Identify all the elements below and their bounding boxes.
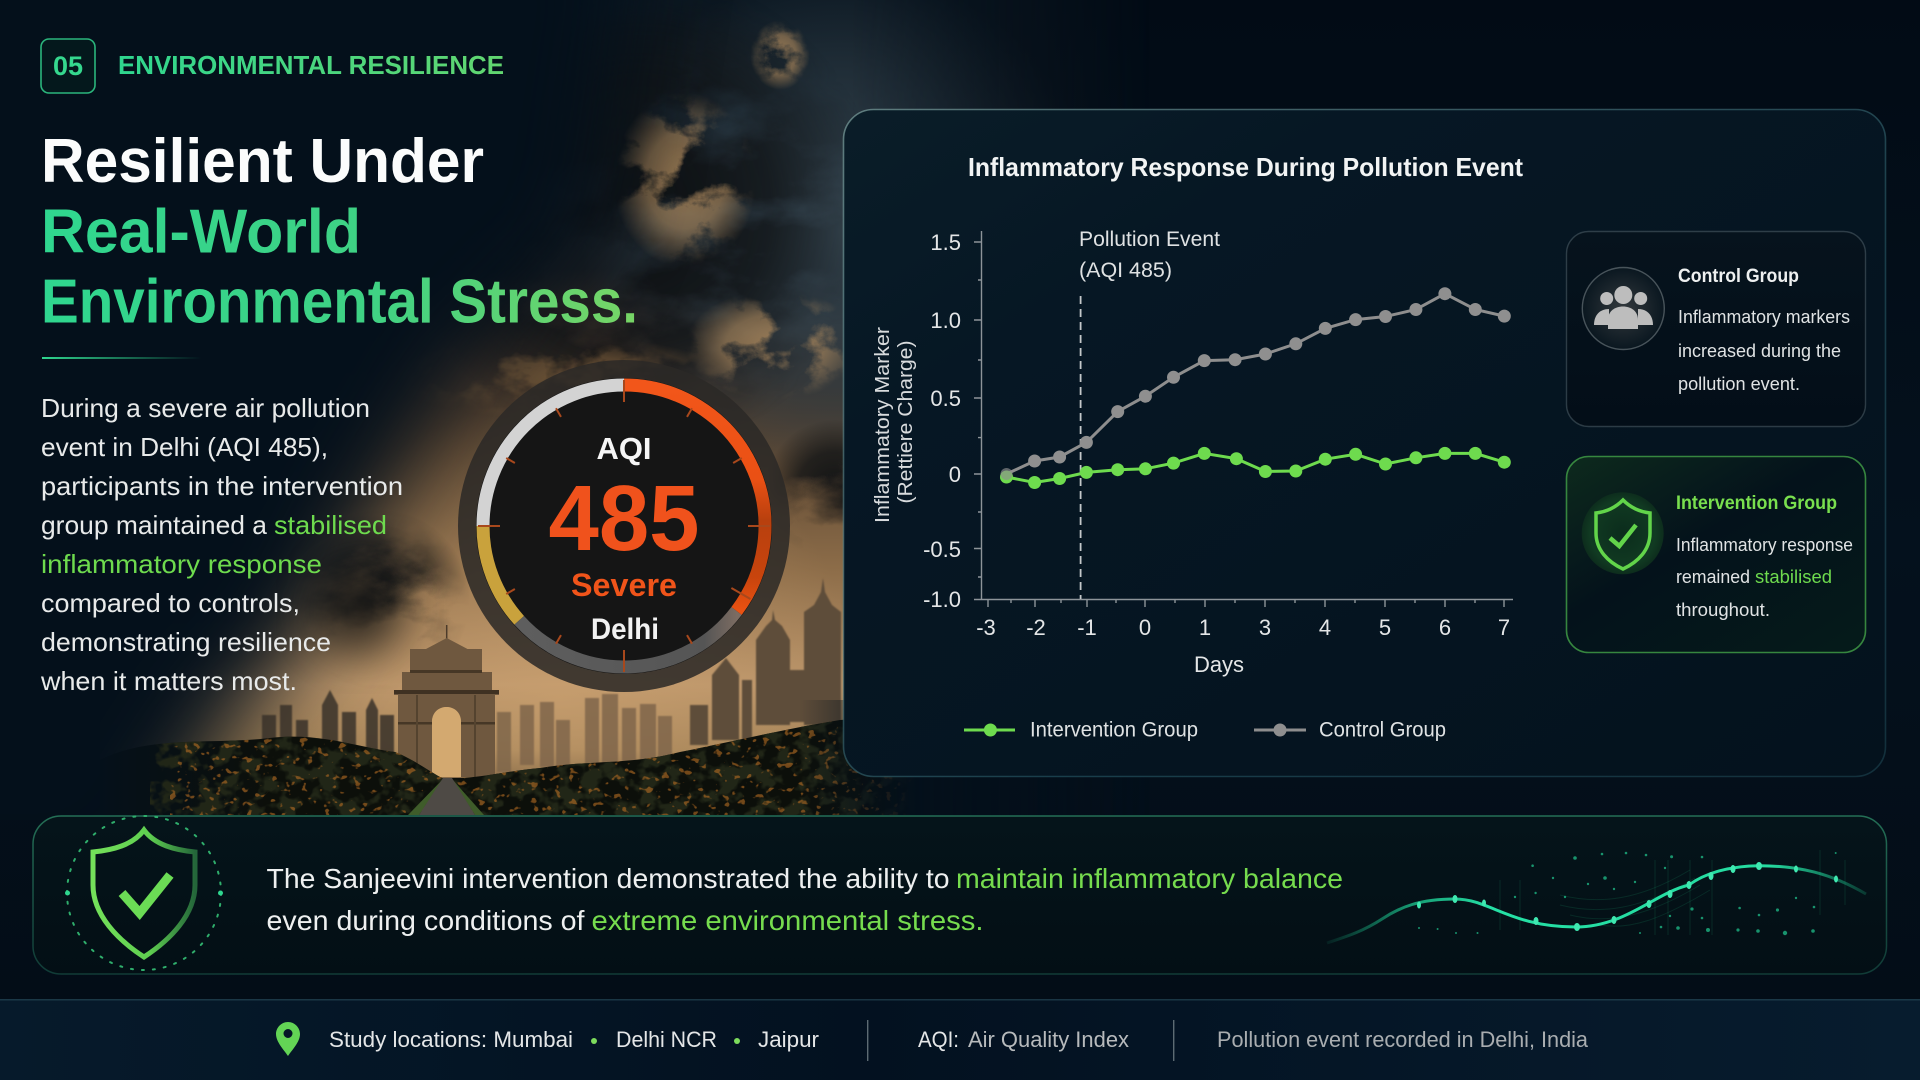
card title: Intervention Group [1676,492,1837,514]
y axis labels: 1.5 [930,230,961,255]
card text: pollution event. [1678,373,1800,394]
intro paragraph: group maintained a [41,510,268,540]
x axis labels: 1 [1199,615,1211,640]
legend: control: Control Group [1319,718,1446,742]
main title: Environmental Stress. [41,268,638,336]
gauge arc: yellow segment [483,526,519,620]
event note: Pollution event recorded in Delhi, India [1217,1027,1589,1052]
intro paragraph: During a severe air pollution [41,393,370,423]
intro paragraph: inflammatory response [41,549,322,579]
x axis labels: -1 [1077,615,1097,640]
x axis labels: 0 [1139,615,1151,640]
AQI label: AQI [596,431,652,466]
panel: key takeaway banner [33,816,1886,974]
main title: Resilient Under [41,127,484,196]
card text: Inflammatory response [1676,534,1853,555]
y axis labels: 0.5 [930,386,961,411]
gauge arc: white segment [483,385,624,526]
x axis title: Days [1194,652,1244,677]
tree canopy [128,720,900,815]
card: intervention group [1566,456,1866,652]
intro paragraph: demonstrating resilience [41,627,331,657]
sky gradient [138,0,978,778]
line chart [871,227,1513,677]
card text: throughout. [1676,599,1770,620]
avenue road [408,779,443,815]
study locations: Jaipur [758,1027,819,1052]
y axis title [871,327,917,523]
pollution event marker [1079,227,1220,599]
legend: control [1254,718,1446,742]
pollution event marker: Pollution Event [1079,227,1220,251]
x axis labels: -2 [1026,615,1046,640]
x axis labels: 7 [1498,615,1510,640]
takeaway text: even during conditions of [266,905,585,936]
study locations: Study locations: Mumbai [329,1027,573,1052]
y axis labels: 0 [949,462,961,487]
y axis labels: 1.0 [930,308,961,333]
x axis labels: -3 [976,615,996,640]
slate upper sky [622,8,989,454]
India Gate monument [394,625,499,777]
background scene: Delhi under polluted sky [134,0,1028,815]
gauge ticks [478,380,770,672]
section label: ENVIRONMENTAL RESILIENCE [118,50,504,80]
AQI gauge [458,360,790,692]
y axis title: Inflammatory Marker [871,327,894,523]
intro paragraph [40,393,403,696]
y axis labels [923,230,961,612]
badge 05: 05 [53,51,83,81]
takeaway text [266,863,1343,936]
study locations: Delhi NCR [616,1027,717,1052]
card text: remained [1676,566,1750,587]
series: intervention group [1000,447,1511,489]
dark cloud over gate [318,568,402,652]
intro paragraph: when it matters most. [40,666,297,696]
x axis labels [976,615,1510,640]
card text: Inflammatory markers [1678,306,1850,327]
badge 05 [41,39,95,93]
gauge arc: grey segment [519,611,737,667]
legend: intervention: Intervention Group [1030,718,1198,742]
chart title: Inflammatory Response During Pollution Event [968,152,1523,182]
intro paragraph: participants in the intervention [41,471,403,501]
section badge and label [41,39,504,93]
x axis labels: 3 [1259,615,1271,640]
main title: Real-World [41,198,361,266]
warm glow [364,458,732,778]
brown cloud band [462,346,692,400]
icon: shield with check [65,816,223,970]
AQI value: 485 [548,466,700,570]
gauge arc: orange segment [624,385,765,611]
main title [41,127,638,336]
pollution event marker: (AQI 485) [1079,258,1172,282]
y axis title: (Rettiere Charge) [894,340,917,504]
x axis labels: 6 [1439,615,1451,640]
card title: Control Group [1678,265,1799,287]
axes [974,231,1513,607]
icon: location pin [276,1022,300,1056]
icon: shield [1582,492,1664,574]
intro paragraph: compared to controls, [41,588,300,618]
card: control group [1566,232,1866,426]
series: control group [1006,287,1511,474]
decorative data wave [1327,850,1866,943]
AQI definition: Air Quality Index [968,1027,1129,1052]
y axis labels: -1.0 [923,587,961,612]
x axis labels: 5 [1379,615,1391,640]
panel: chart [844,110,1886,776]
far skyline [262,578,841,772]
footer bar [0,999,1920,1080]
severity label: Severe [571,567,677,603]
takeaway text: The Sanjeevini intervention demonstrated the ability to [266,863,950,894]
y axis labels: -0.5 [923,537,961,562]
card text [1678,306,1850,394]
dark storm clouds [306,40,844,642]
study locations [329,1027,819,1052]
card text: stabilised [1755,566,1832,587]
icon: people [1582,268,1664,350]
intro paragraph: event in Delhi (AQI 485), [41,432,328,462]
takeaway text: maintain inflammatory balance [956,863,1343,894]
x axis labels: 4 [1319,615,1331,640]
city label: Delhi [591,613,659,646]
card text: increased during the [1678,340,1841,361]
AQI definition: AQI: [918,1027,959,1052]
chart legend [964,718,1446,742]
intro paragraph: stabilised [274,510,387,540]
takeaway text: extreme environmental stress. [592,905,984,936]
left dark fade [100,0,669,760]
bottom right fade [806,700,1128,815]
sunlit cloud tufts [621,23,844,392]
card text [1676,534,1853,620]
